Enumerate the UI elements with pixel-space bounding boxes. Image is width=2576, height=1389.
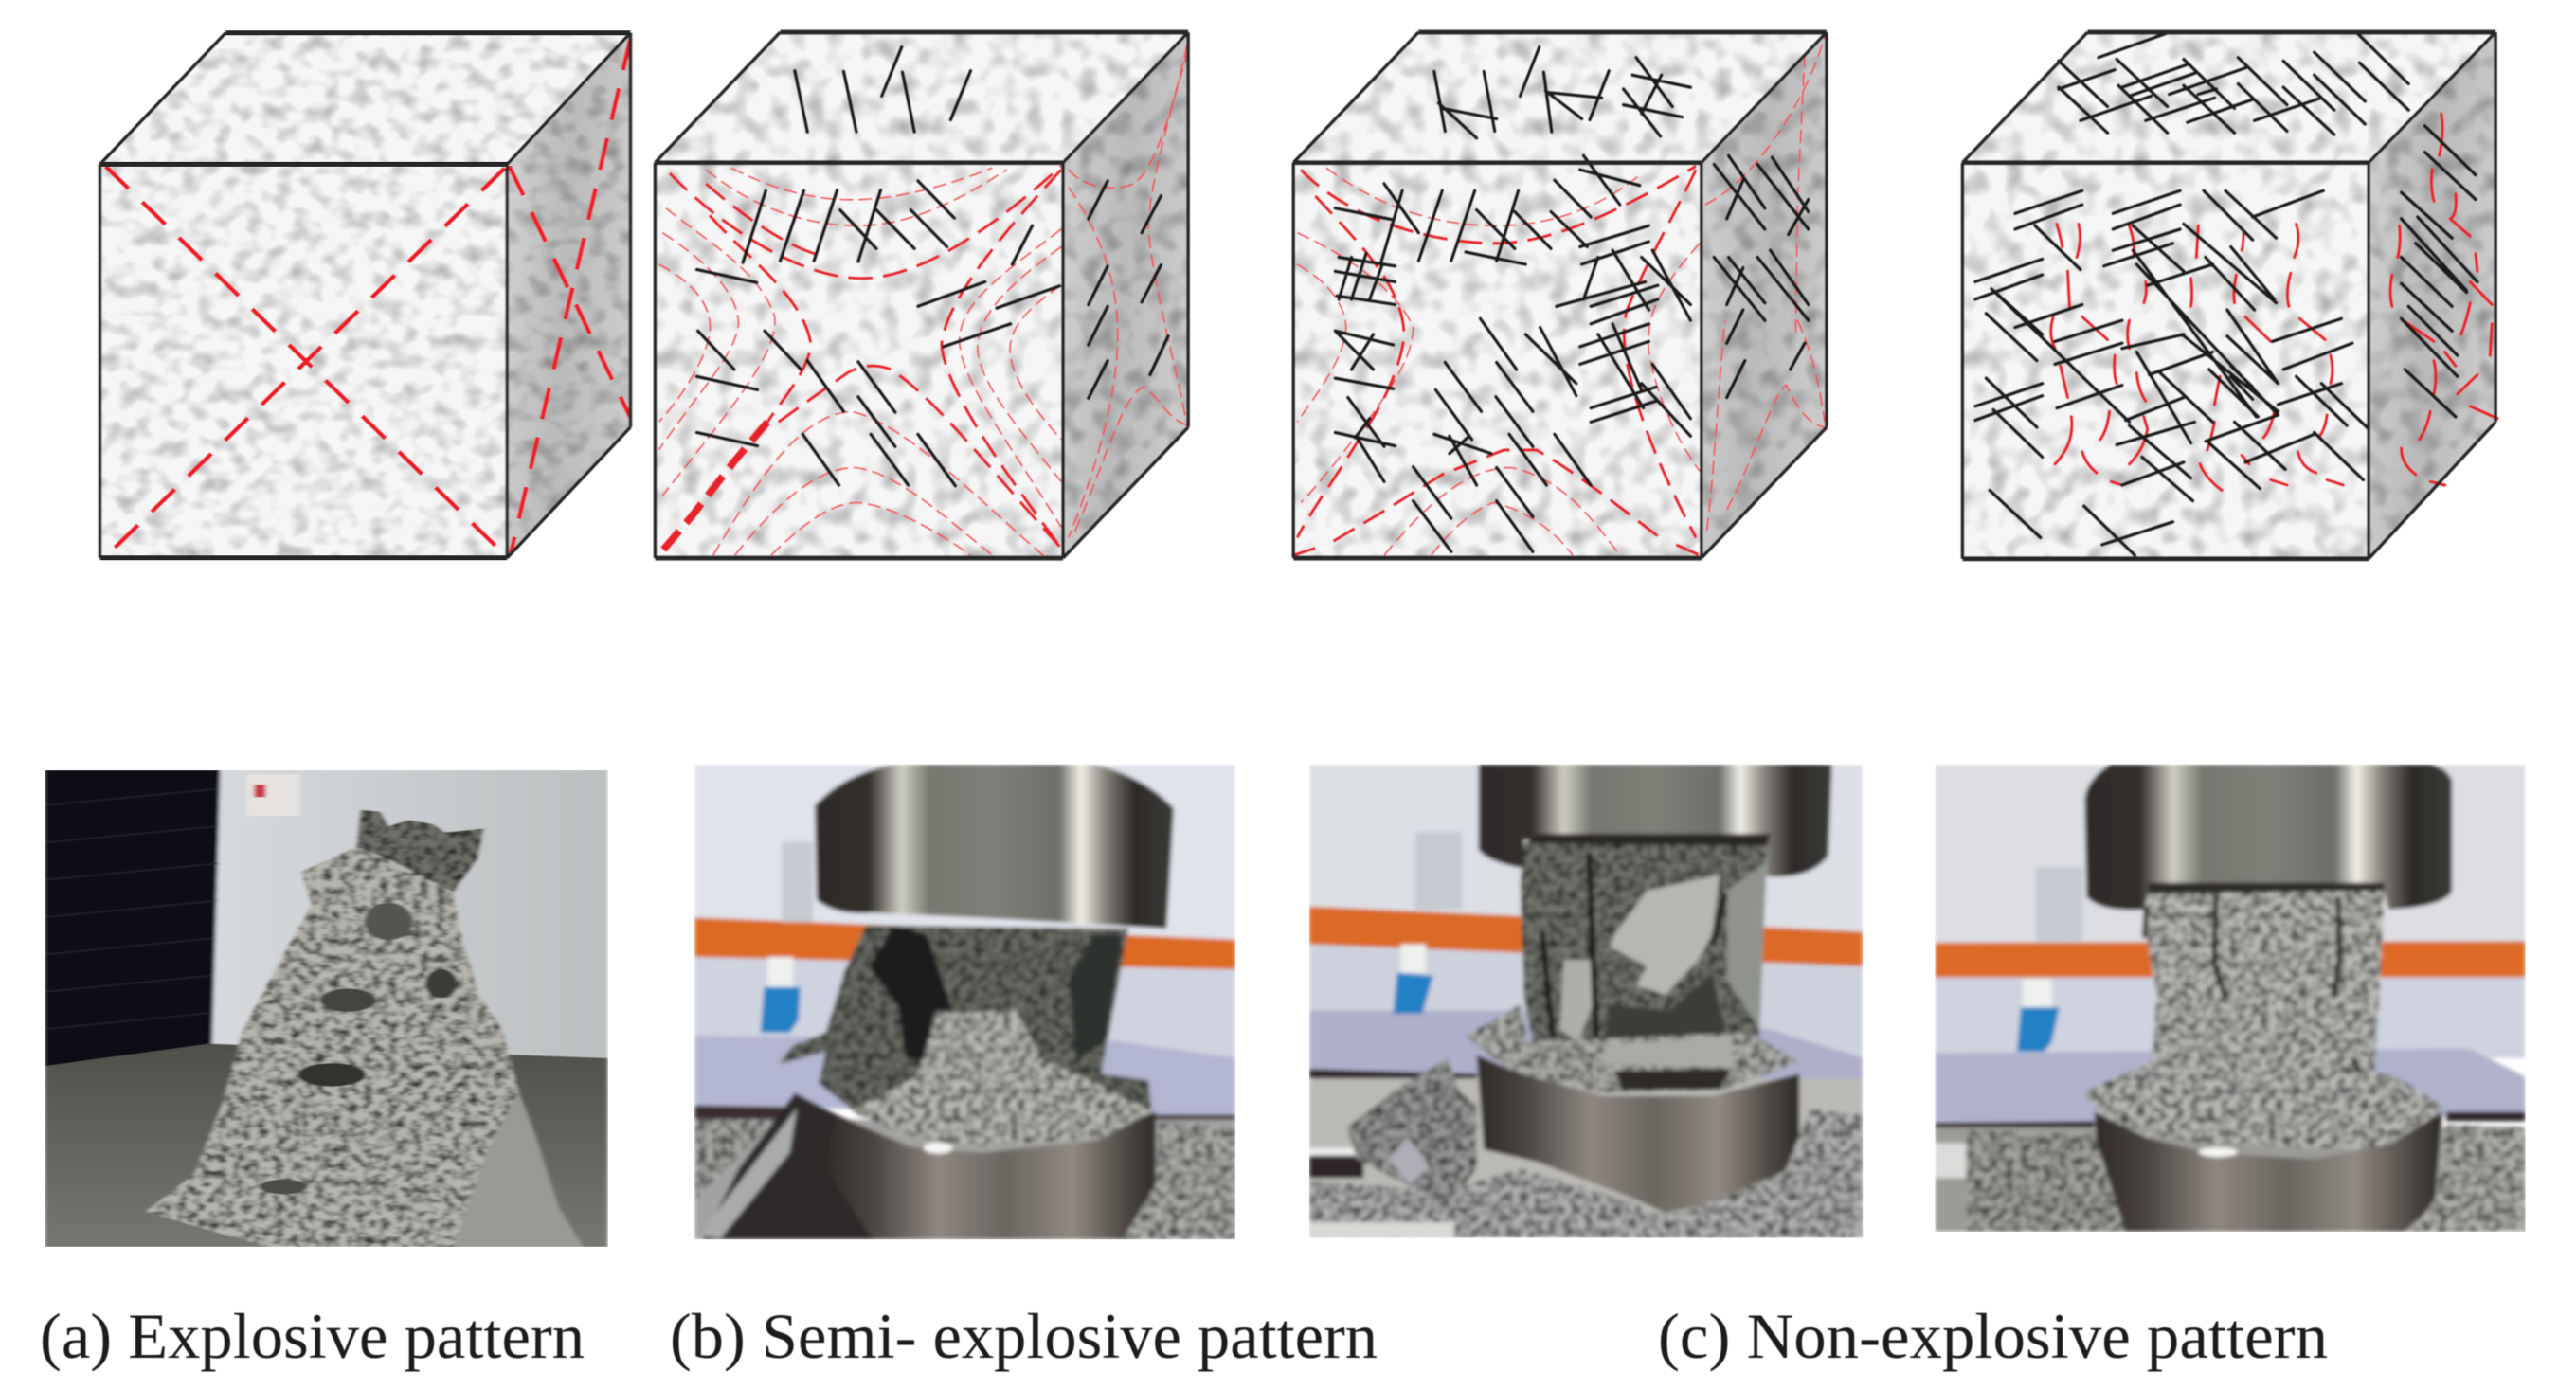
photo: non-explosive specimen in press [1935,765,2526,1232]
cube faces [1962,32,2495,559]
cube faces [100,33,630,558]
thick red cracks [1293,166,1700,555]
black fibres [1335,47,1809,551]
cube outline [655,32,1188,558]
panel: non-explosive crack cube with dense fibres [1962,32,2497,559]
panel: semi-explosive crack cube with more fibres [1293,32,1827,558]
photo: explosive failure specimen [45,770,608,1247]
caption: semi-explosive pattern: (b) Semi- explosive pattern [670,1300,1378,1372]
panel: explosive crack cube [100,33,630,558]
panel: semi-explosive crack cube with few fibres [655,32,1188,558]
cube outline [1962,32,2495,559]
thick red cracks [658,166,1061,555]
thin red cracks [1297,36,1825,555]
black dense fibres [1975,34,2477,555]
short red cracks [2051,114,2497,491]
photo: semi-explosive specimen in press [694,765,1235,1239]
cube outline [1293,32,1827,558]
photo: semi-explosive cracked specimen in press [1309,765,1863,1238]
cube faces [1293,32,1827,558]
red diagonal cracks [105,39,630,557]
caption: non-explosive pattern: (c) Non-explosive pattern [1658,1300,2328,1372]
caption: explosive pattern: (a) Explosive pattern [40,1300,585,1372]
thin red cracks [658,40,1188,555]
cube faces [655,32,1188,558]
cube outline [100,33,630,558]
black fibres [696,47,1168,486]
